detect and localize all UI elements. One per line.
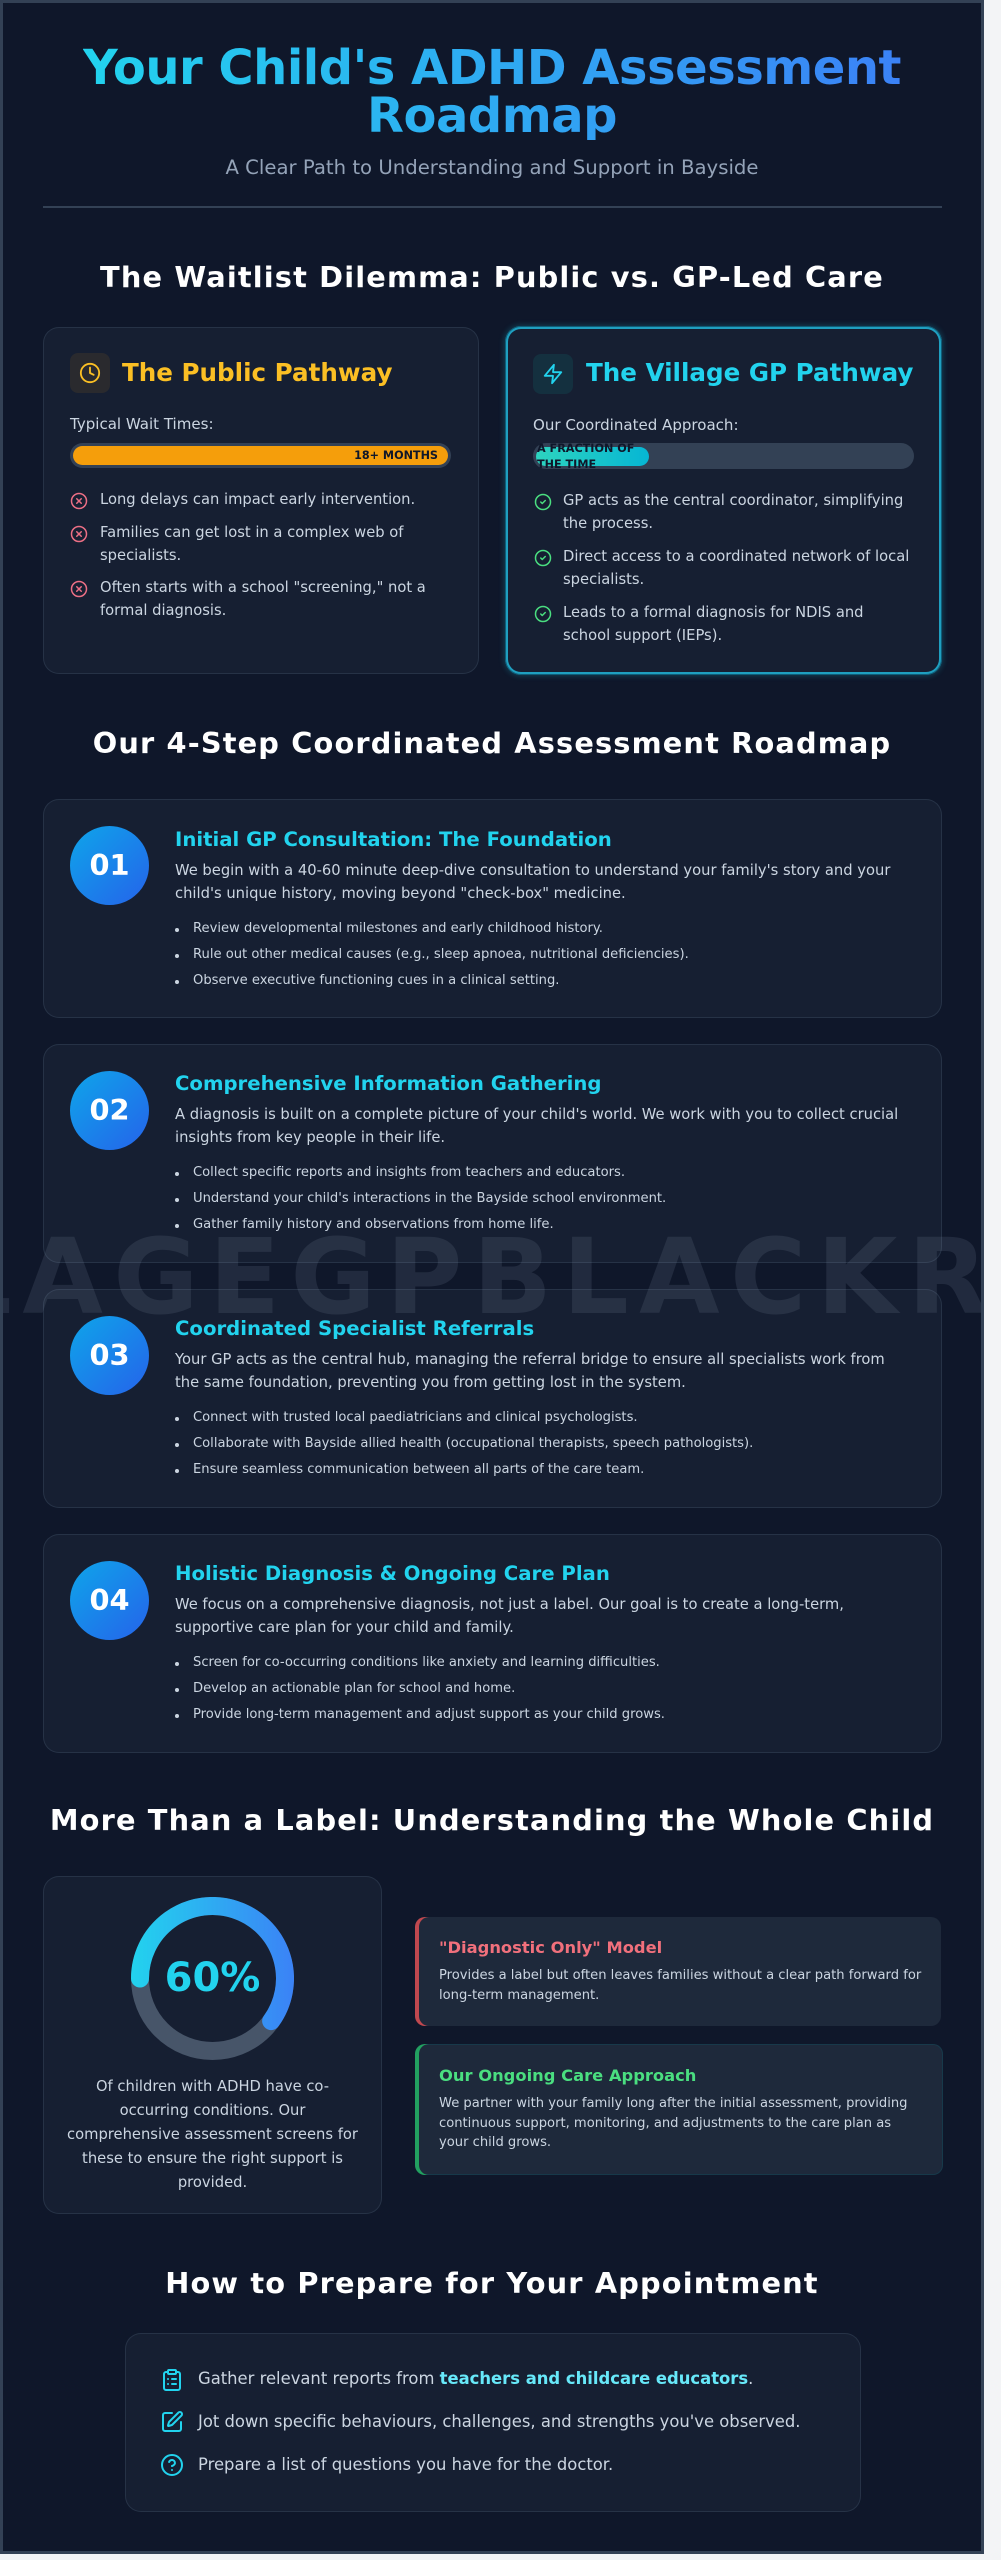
benefit 3: school support (IEPs). xyxy=(563,627,722,644)
benefit 3 xyxy=(534,604,864,644)
prepare item 3: Prepare a list of questions you have for the doctor. xyxy=(198,2455,613,2474)
approach label: Our Coordinated Approach: xyxy=(533,416,739,434)
step 1 badge: 01 xyxy=(89,848,130,882)
stat caption xyxy=(67,2078,358,2191)
step 4 description: We focus on a comprehensive diagnosis, not just a label. Our goal is to create a long-term, xyxy=(175,1596,844,1613)
step 1 badge xyxy=(70,826,149,905)
step 2 bullets: Understand your child's interactions in the Bayside school environment. xyxy=(193,1191,666,1206)
step 4 title: Holistic Diagnosis & Ongoing Care Plan xyxy=(175,1562,610,1585)
public heading: The Public Pathway xyxy=(122,358,392,387)
title xyxy=(83,44,901,140)
diagnostic title: "Diagnostic Only" Model xyxy=(439,1938,662,1957)
step 3 title: Coordinated Specialist Referrals xyxy=(175,1317,534,1340)
panel: step 2 xyxy=(43,1044,942,1263)
step 1 bullets: Rule out other medical causes (e.g., sleep apnoea, nutritional deficiencies). xyxy=(193,947,689,962)
title: Roadmap xyxy=(367,88,617,144)
icon: lightning xyxy=(533,354,573,394)
stat caption: Of children with ADHD have co- xyxy=(96,2078,329,2095)
benefit 1 xyxy=(534,492,903,532)
stat caption: these to ensure the right support is xyxy=(82,2150,343,2167)
icon: question xyxy=(161,2454,183,2476)
step 4 badge xyxy=(70,1561,149,1640)
wait time bar: 18+ MONTHS xyxy=(354,449,438,462)
donut value: 60% xyxy=(165,1955,260,2001)
icon: clock xyxy=(70,353,110,393)
benefit 2: Direct access to a coordinated network of local xyxy=(563,548,909,565)
step 1 bullets: Observe executive functioning cues in a clinical setting. xyxy=(193,973,559,988)
step 4 bullets: Screen for co-occurring conditions like anxiety and learning difficulties. xyxy=(193,1655,660,1670)
step 4 description line 2: supportive care plan for your child and family. xyxy=(175,1619,514,1636)
step 2 title: Comprehensive Information Gathering xyxy=(175,1072,601,1095)
panel: step 4 xyxy=(43,1534,942,1753)
ongoing care text xyxy=(439,2096,908,2150)
step 3 description: Your GP acts as the central hub, managing the referral bridge to ensure all specialists work from xyxy=(175,1351,885,1368)
drawback 2: specialists. xyxy=(100,547,181,564)
drawback 3 xyxy=(70,579,426,619)
step 4 badge: 04 xyxy=(89,1583,130,1617)
step 4 bullets xyxy=(175,1655,665,1722)
stat caption: provided. xyxy=(178,2174,247,2191)
drawback 3: formal diagnosis. xyxy=(100,602,226,619)
ongoing care text: We partner with your family long after the initial assessment, providing xyxy=(439,2096,908,2111)
benefit 2 xyxy=(534,548,909,588)
step 2 bullets xyxy=(175,1165,666,1232)
step 4 bullets: Provide long-term management and adjust support as your child grows. xyxy=(193,1707,665,1722)
prepare item 1: Gather relevant reports from teachers and childcare educators. xyxy=(198,2369,753,2388)
step 3 bullets: Collaborate with Bayside allied health (occupational therapists, speech pathologists). xyxy=(193,1436,753,1451)
ongoing care title: Our Ongoing Care Approach xyxy=(439,2066,696,2085)
coordinated time bar xyxy=(533,443,914,469)
title: Your Child's ADHD Assessment xyxy=(83,40,901,96)
drawback 3: Often starts with a school "screening," not a xyxy=(100,579,426,596)
step 2 description line 2: insights from key people in their life. xyxy=(175,1129,445,1146)
step 1 bullets xyxy=(175,921,689,988)
diagnostic text: Provides a label but often leaves families without a clear path forward for xyxy=(439,1968,921,1983)
diagnostic text: long-term management. xyxy=(439,1988,599,2003)
step 1 title: Initial GP Consultation: The Foundation xyxy=(175,828,612,851)
subtitle: A Clear Path to Understanding and Support in Bayside xyxy=(225,156,759,179)
benefit 1: the process. xyxy=(563,515,653,532)
heading: roadmap: Our 4-Step Coordinated Assessment Roadmap xyxy=(93,726,891,760)
step 2 bullets: Collect specific reports and insights from teachers and educators. xyxy=(193,1165,625,1180)
prepare item 2: Jot down specific behaviours, challenges, and strengths you've observed. xyxy=(198,2412,800,2431)
benefit 1: GP acts as the central coordinator, simplifying xyxy=(563,492,903,509)
icon: pencil note xyxy=(162,2411,183,2432)
benefit 2: specialists. xyxy=(563,571,644,588)
panel: step 1 xyxy=(43,799,942,1018)
benefit 3: Leads to a formal diagnosis for NDIS and xyxy=(563,604,864,621)
callout: ongoing care approach xyxy=(415,2044,943,2175)
stat caption: occurring conditions. Our xyxy=(120,2102,305,2119)
heading: prepare: How to Prepare for Your Appointment xyxy=(165,2266,819,2300)
diagnostic text xyxy=(439,1968,922,2003)
step 1 description: We begin with a 40-60 minute deep-dive consultation to understand your family's story and your xyxy=(175,862,890,879)
step 3 badge xyxy=(70,1316,149,1395)
ongoing care text: continuous support, monitoring, and adjustments to the care plan as xyxy=(439,2116,891,2131)
panel: preparation checklist xyxy=(125,2333,861,2512)
step 2 bullets: Gather family history and observations from home life. xyxy=(193,1217,554,1232)
step 3 bullets: Connect with trusted local paediatricians and clinical psychologists. xyxy=(193,1410,638,1425)
panel: public pathway xyxy=(43,327,479,674)
step 2 description: A diagnosis is built on a complete picture of your child's world. We work with you to collect crucial xyxy=(175,1106,898,1123)
step 3 description line 2: the same foundation, preventing you from getting lost in the system. xyxy=(175,1374,686,1391)
step 3 bullets: Ensure seamless communication between all parts of the care team. xyxy=(193,1462,644,1477)
coordinated time bar: A FRACTION OF xyxy=(537,442,634,455)
wait label: Typical Wait Times: xyxy=(70,415,214,433)
donut chart xyxy=(131,1897,294,2060)
coordinated time bar: THE TIME xyxy=(537,458,596,471)
step 4 bullets: Develop an actionable plan for school and home. xyxy=(193,1681,515,1696)
step 2 badge: 02 xyxy=(89,1093,130,1127)
wait time bar xyxy=(70,443,451,468)
drawback 1: Long delays can impact early intervention. xyxy=(100,491,415,508)
step 3 bullets xyxy=(175,1410,753,1477)
step 3 badge: 03 xyxy=(89,1338,130,1372)
heading: whole child: More Than a Label: Understanding the Whole Child xyxy=(50,1803,934,1837)
icon: clipboard xyxy=(163,2369,181,2391)
panel: village gp pathway xyxy=(505,326,942,675)
drawback 2: Families can get lost in a complex web of xyxy=(100,524,403,541)
ongoing care text: your child grows. xyxy=(439,2135,551,2150)
heading: waitlist dilemma: The Waitlist Dilemma: Public vs. GP-Led Care xyxy=(100,260,884,294)
village heading: The Village GP Pathway xyxy=(586,358,913,387)
step 1 description line 2: child's unique history, moving beyond "check-box" medicine. xyxy=(175,885,626,902)
panel: co-occurring stat xyxy=(43,1876,382,2214)
panel: step 3 xyxy=(43,1289,942,1508)
step 2 badge xyxy=(70,1071,149,1150)
callout: diagnostic only model xyxy=(415,1917,941,2026)
stat caption: comprehensive assessment screens for xyxy=(67,2126,358,2143)
step 1 bullets: Review developmental milestones and early childhood history. xyxy=(193,921,603,936)
drawback 2 xyxy=(70,524,404,564)
